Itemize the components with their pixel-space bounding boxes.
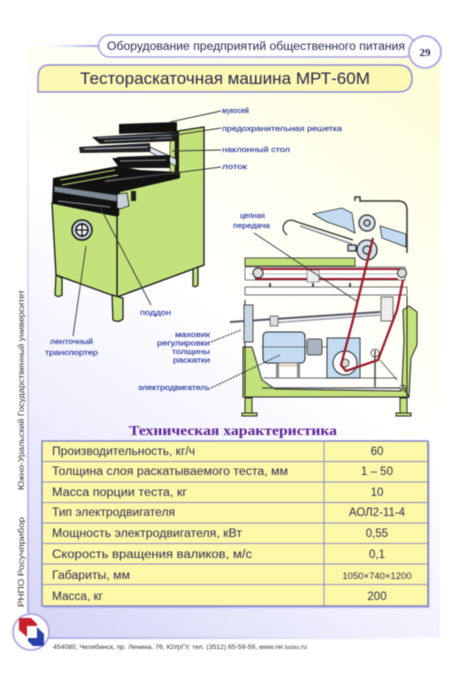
- label: chain drive: передача: [233, 221, 271, 230]
- row: roller speed: Скорость вращения валиков, м/с: [52, 549, 252, 561]
- hopper: [313, 208, 355, 233]
- upper frame and deck: [52, 131, 180, 216]
- vertical side text: РНПО Росучприбор: [16, 517, 26, 607]
- row: mass: Масса, кг: [52, 591, 103, 603]
- frame with green base: [243, 296, 417, 397]
- footer address: 454080, Челябинск, пр. Ленина, 76, ЮУрГУ, тел. (3512) 65-59-59, www.rel.susu.ru: [53, 643, 307, 651]
- row: motor type: АОЛ2-11-4: [349, 507, 406, 519]
- title pill: [38, 65, 412, 92]
- label: electric motor: электродвигатель: [138, 383, 210, 392]
- label: belt conveyor: [45, 337, 98, 357]
- label: belt conveyor: ленточный: [50, 337, 93, 346]
- label: chain drive: цепная: [240, 211, 265, 220]
- tension arm: [262, 349, 406, 391]
- logo blue arrow: [28, 627, 44, 646]
- table grid: [42, 441, 430, 608]
- specification table: [42, 441, 430, 608]
- tray: [117, 155, 170, 168]
- header: section pill with page number: 29: [420, 47, 431, 59]
- label: thickness handwheel: [157, 330, 211, 364]
- label: thickness handwheel: раскатки: [173, 356, 210, 364]
- handwheel: [72, 220, 92, 240]
- row: mass: [52, 591, 387, 603]
- hooked guide: [283, 220, 353, 244]
- logo red arrow: [19, 618, 37, 637]
- top cover: [355, 197, 407, 253]
- label: flour sifter: мукосей: [222, 106, 249, 115]
- leader lines: exterior: [73, 111, 221, 336]
- label: chain drive: [233, 211, 271, 230]
- body panels: [52, 127, 204, 297]
- label: thickness handwheel: регулировки: [157, 338, 210, 348]
- header: section pill with page number: [48, 35, 441, 68]
- label: belt conveyor: транспортер: [45, 348, 98, 357]
- university name: Южно-Уральский Государственный университет: [16, 290, 26, 490]
- row: motor power: [52, 528, 388, 540]
- title text: Тестораскаточная машина МРТ-60М: [80, 69, 370, 88]
- row: capacity: [52, 446, 383, 458]
- row: capacity: Производительность, кг/ч: [52, 446, 195, 458]
- rollers: [348, 215, 377, 260]
- green table top: [245, 258, 355, 266]
- row: mass: 200: [367, 591, 387, 603]
- row: dough portion mass: [52, 487, 383, 499]
- label: thickness handwheel: маховик: [175, 330, 211, 339]
- row: motor type: Тип электродвигателя: [52, 507, 175, 519]
- logo: [13, 614, 49, 650]
- leader lines: section view: [211, 233, 358, 388]
- table heading: Техническая характеристика: [129, 424, 337, 439]
- inclined table: [79, 143, 176, 166]
- row: roller speed: 0,1: [369, 549, 385, 561]
- adjustment rod and post: [230, 305, 380, 342]
- safety grid: [92, 132, 177, 144]
- feet: [242, 398, 411, 416]
- electric motor: [261, 332, 330, 378]
- conveyor with belts: [245, 267, 407, 295]
- gearbox: [327, 338, 360, 378]
- row: dough portion mass: 10: [371, 487, 383, 499]
- label: tray: лоток: [222, 162, 248, 171]
- label: tray pan: поддон: [140, 308, 171, 317]
- feed rollers: [54, 186, 136, 209]
- row: dough portion mass: Масса порции теста, кг: [52, 487, 187, 499]
- outfeed tray: [380, 226, 406, 247]
- label: inclined table: наклонный стол: [222, 145, 290, 154]
- row: dough layer thickness: Толщина слоя раскатываемого теста, мм: [52, 466, 288, 478]
- mount plate: [381, 297, 393, 321]
- section name: Оборудование предприятий общественного питания: [107, 41, 405, 53]
- row: motor power: Мощность электродвигателя, кВт: [52, 528, 243, 540]
- coupling: [307, 339, 322, 355]
- row: dimensions: [52, 570, 412, 582]
- row: motor type: [52, 507, 406, 519]
- label: safety grid: предохранительная решетка: [222, 124, 343, 133]
- legs: [55, 267, 198, 321]
- row: motor power: 0,55: [366, 528, 388, 540]
- vertical side text: [16, 290, 26, 607]
- flour sifter: [119, 122, 177, 134]
- row: capacity: 60: [371, 446, 383, 458]
- row: roller speed: [52, 549, 385, 561]
- chain drive: [341, 238, 403, 371]
- row: dough layer thickness: 1 – 50: [361, 466, 393, 478]
- row: dimensions: Габариты, мм: [52, 570, 130, 582]
- label: thickness handwheel: толщины: [172, 347, 210, 356]
- machine exterior view: [52, 122, 204, 321]
- machine cross-section diagram: [230, 197, 417, 416]
- background panel: [27, 46, 440, 639]
- row: dough layer thickness: [52, 466, 393, 478]
- row: dimensions: 1050×740×1200: [342, 571, 412, 582]
